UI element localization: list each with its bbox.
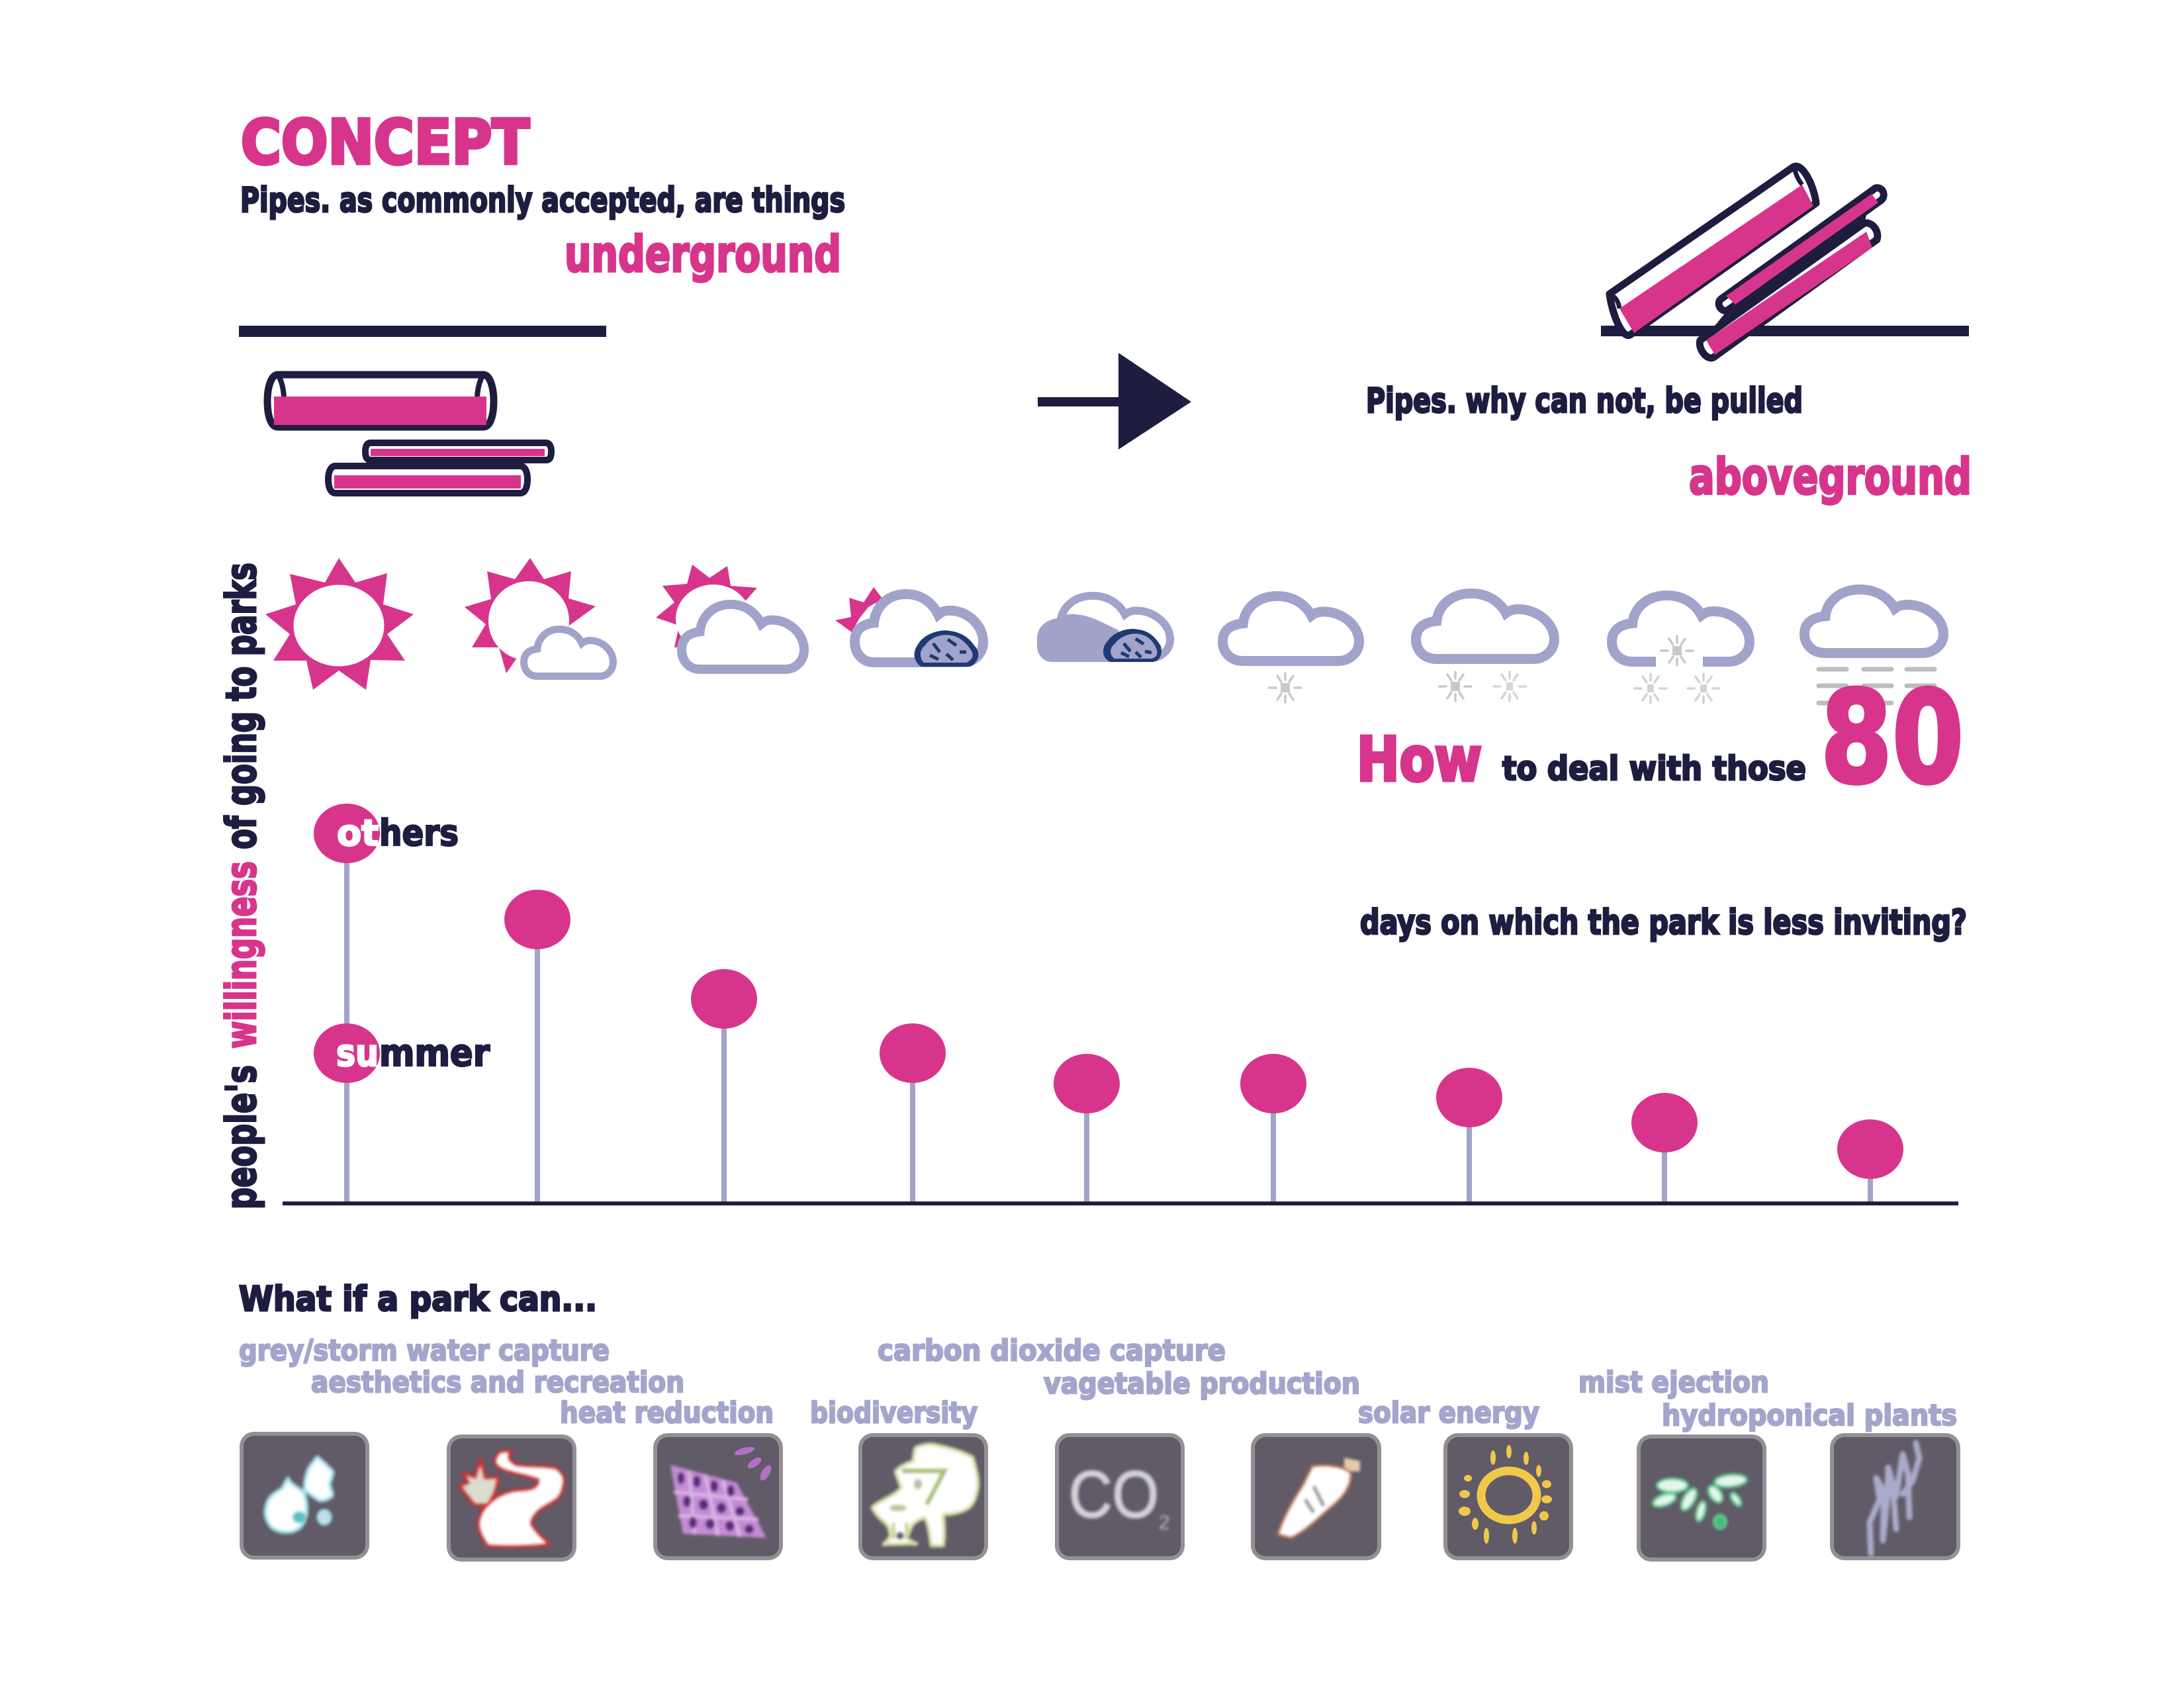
capability labels: carbon dioxide capture bbox=[878, 1334, 1226, 1368]
capability labels: vagetable production bbox=[1044, 1367, 1360, 1401]
icon tile: hydroponic plants scribble bbox=[1830, 1433, 1960, 1560]
icon: full sun bbox=[265, 558, 414, 690]
icon: filled cloud with dark cloud bbox=[1037, 596, 1170, 662]
y axis label bbox=[217, 563, 265, 1209]
icon tile: CO2: 2 bbox=[1159, 1512, 1170, 1534]
icon tile: CO2: CO bbox=[1069, 1458, 1159, 1532]
arrow bbox=[1038, 353, 1191, 449]
panel: underground concept bbox=[239, 107, 845, 493]
capability labels bbox=[239, 1334, 1957, 1432]
axis bbox=[283, 1201, 1958, 1205]
label: summer: su bbox=[336, 1032, 379, 1075]
y axis label: willingness bbox=[217, 861, 265, 1049]
capability labels: solar energy bbox=[1358, 1396, 1539, 1430]
icon: cloud with three snowflakes bbox=[1612, 596, 1750, 703]
text: days question: days on which the park is less inviting? bbox=[1360, 903, 1967, 943]
y axis label: people's bbox=[217, 1065, 265, 1209]
label: others: hers bbox=[379, 812, 459, 854]
y axis label: of going to parks bbox=[217, 563, 265, 849]
icons: weather row bbox=[265, 558, 1943, 703]
capability labels: aesthetics and recreation bbox=[311, 1366, 684, 1399]
icon tile: leaves bbox=[1637, 1434, 1766, 1562]
number: 80: 80 bbox=[1821, 665, 1964, 812]
icon: sun with small cloud bbox=[465, 558, 613, 677]
icon: cloud with one snowflake bbox=[1223, 596, 1359, 702]
capability labels: hydroponical plants bbox=[1662, 1399, 1957, 1432]
stems bbox=[344, 833, 1873, 1203]
text: aboveground: aboveground bbox=[1689, 447, 1972, 506]
text: pipes statement: Pipes. as commonly accepted, are things bbox=[240, 181, 845, 220]
icon tile: road and flame bbox=[447, 1434, 576, 1562]
label: others: ot bbox=[337, 812, 379, 854]
panel: how to deal with 80 days bbox=[1357, 665, 1967, 943]
heading: what if a park can: What if a park can... bbox=[239, 1280, 597, 1319]
icon: cloud with dark cloud and small sun bbox=[835, 587, 983, 667]
icon: aboveground pipes bbox=[1610, 166, 1884, 358]
icon tile: carrot bbox=[1251, 1433, 1381, 1560]
ground line left bbox=[239, 326, 606, 337]
label: summer: mmer bbox=[379, 1032, 490, 1075]
lollipop chart bbox=[283, 804, 1958, 1205]
icon tile: solar panel bbox=[653, 1433, 783, 1560]
text: to deal with those: to deal with those bbox=[1502, 749, 1806, 788]
label: summer bbox=[336, 1032, 490, 1075]
markers bbox=[314, 804, 1903, 1179]
capability labels: heat reduction bbox=[560, 1396, 774, 1430]
text: pipes question: Pipes. why can not, be pulled bbox=[1366, 381, 1803, 421]
capability labels: mist ejection bbox=[1578, 1366, 1769, 1399]
title: CONCEPT bbox=[241, 107, 529, 178]
text: underground: underground bbox=[565, 225, 841, 283]
panel: aboveground concept bbox=[1366, 166, 1972, 506]
icon tile: tree bbox=[858, 1433, 988, 1560]
capability labels: grey/storm water capture bbox=[239, 1334, 610, 1368]
ground line right bbox=[1601, 326, 1969, 336]
capability labels: biodiversity bbox=[810, 1396, 978, 1430]
icon: sun behind cloud bbox=[656, 565, 804, 669]
label: others bbox=[337, 812, 459, 854]
icon tile: CO2 bbox=[1055, 1433, 1185, 1560]
icon: underground pipes bbox=[267, 375, 551, 493]
icon: cloud with fog bbox=[1804, 589, 1943, 703]
icon tile: water drops bbox=[240, 1432, 369, 1560]
icon: cloud with two snowflakes bbox=[1416, 593, 1554, 701]
text: How: How bbox=[1357, 724, 1482, 795]
icon tile: sun bbox=[1443, 1433, 1573, 1560]
